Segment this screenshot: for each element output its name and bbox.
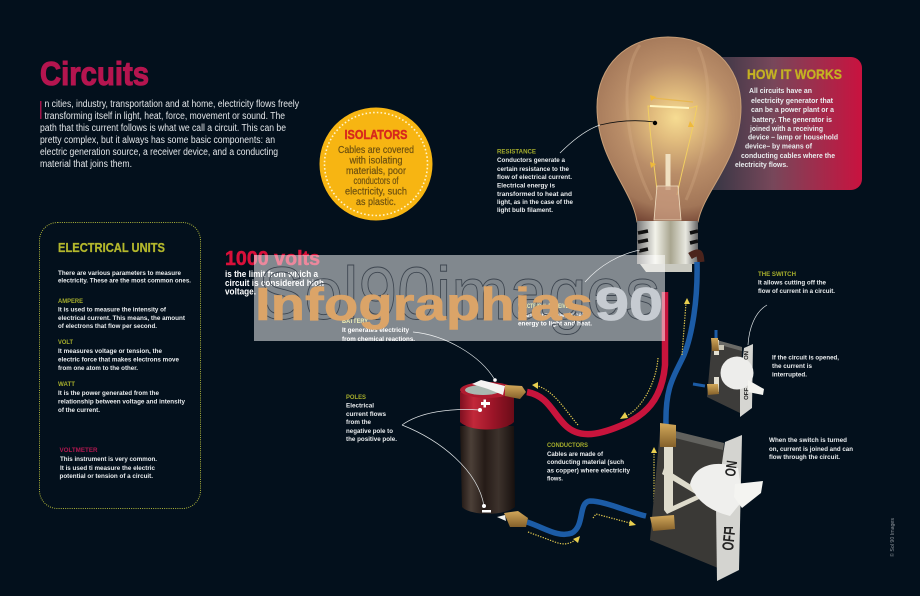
heading: how it works: HOW IT WORKS	[747, 66, 842, 82]
text: circuit opened	[772, 354, 839, 378]
intro text block: electric generation source, a receiver device, and a conducting	[40, 147, 278, 158]
text: conductors: as copper) where electricity	[547, 468, 630, 474]
callout: isolators: materials, poor	[346, 166, 407, 177]
text: poles: POLES	[346, 394, 367, 401]
how it works text: All circuits have an	[749, 88, 812, 95]
blue cable upper	[666, 262, 697, 425]
text: the switch: THE SWITCH	[758, 271, 796, 278]
how it works text: electricity flows.	[735, 162, 788, 169]
watermark infographias: Infographias	[255, 278, 593, 330]
text: resistance: Electrical energy is	[497, 182, 555, 190]
how it works text: device– by means of	[745, 144, 813, 150]
text: electrical receiver: energy to light and heat.	[518, 320, 592, 328]
watermark banner	[254, 252, 665, 341]
filament	[648, 95, 697, 220]
text: circuit opened: interrupted.	[772, 372, 807, 378]
how it works text: conducting cables where the	[741, 153, 835, 160]
ampere: It is used to measure the intensity of	[58, 306, 167, 314]
text: conductors	[547, 442, 630, 482]
voltmeter	[60, 447, 157, 480]
text: circuit closed: When the switch is turned	[769, 437, 847, 444]
text: conductors: CONDUCTORS	[547, 442, 589, 449]
red cable	[527, 292, 665, 434]
light bulb	[597, 37, 741, 272]
current flow arrows	[528, 298, 690, 544]
volt: VOLT	[58, 339, 73, 346]
voltmeter: VOLTMETER	[60, 447, 98, 454]
large switch (closed): OFF	[718, 527, 739, 551]
battery connectors	[505, 385, 526, 399]
callout: isolators	[320, 108, 432, 220]
text: circuit opened: the current is	[772, 363, 812, 370]
text: 1000 volts: 1000 volts	[225, 248, 320, 270]
switch plate	[716, 435, 742, 581]
blue cable lower	[527, 501, 646, 534]
copyright: © Sol 90 Images	[889, 518, 896, 557]
callout: isolators: as plastic.	[356, 197, 396, 208]
watt: of the current.	[58, 407, 100, 414]
text: poles: Electrical	[346, 402, 374, 410]
watt: It is the power generated from the	[58, 390, 159, 397]
contacts and arms	[664, 445, 673, 510]
text: 1000 volts: is the limit from which a	[225, 269, 319, 279]
text: 1000 volts: voltage.	[225, 286, 256, 296]
text: poles: current flows	[346, 411, 386, 418]
watt: relationship between voltage and intensity	[58, 398, 185, 406]
callout: isolators: Cables are covered	[338, 145, 414, 156]
text: the switch: It allows cutting off the	[758, 280, 826, 286]
text: poles	[346, 394, 397, 443]
intro text block: material that joins them.	[40, 159, 132, 170]
watt: WATT	[58, 381, 75, 388]
small switch (open)	[707, 338, 764, 417]
voltmeter: It is used ti measure the electric	[60, 465, 155, 472]
text: resistance: certain resistance to the	[497, 166, 569, 173]
text: battery: BATTERY	[342, 318, 369, 325]
small switch (open): OFF	[744, 388, 750, 400]
text: electrical receiver: ELECTRICAL RECEIVER	[518, 303, 572, 310]
text: circuit closed	[769, 437, 853, 461]
text: battery	[342, 318, 415, 343]
text: resistance	[497, 148, 573, 214]
battery	[460, 380, 528, 527]
how it works text: device – lamp or household	[748, 134, 838, 142]
ampere: electrical current. This means, the amount	[58, 315, 186, 322]
brass terminals	[660, 423, 676, 447]
text: poles: from the	[346, 419, 371, 426]
switch disc	[690, 464, 743, 516]
blue stub on small switch	[693, 330, 716, 386]
panel: electrical units	[40, 222, 200, 508]
heading: electrical units: ELECTRICAL UNITS	[58, 241, 165, 255]
how it works text: electricity generator that	[751, 98, 834, 105]
small switch (open): ON	[744, 351, 750, 360]
voltmeter: potential or tension of a circuit.	[60, 473, 153, 480]
text: the switch: flow of current in a circuit.	[758, 288, 835, 295]
large switch (closed)	[650, 423, 763, 581]
leader lines	[402, 121, 767, 508]
watermark 90: 90	[595, 278, 663, 330]
text: resistance: transformed to heat and	[497, 191, 572, 198]
text: battery: It generates electricity	[342, 327, 409, 334]
how it works text: joined with a receiving	[749, 126, 823, 133]
callout: isolators: with isolating	[349, 156, 402, 166]
volt: from one atom to the other.	[58, 365, 138, 372]
intro text block: transforming itself in light, heat, force, movement or sound. The	[44, 111, 285, 122]
volt	[58, 339, 179, 372]
watermark outline text: Sol90images	[258, 252, 660, 335]
ampere: of electrons that flow per second.	[58, 323, 157, 330]
intro text block: path that this current follows is what we call a circuit. This can be	[40, 123, 286, 134]
intro text block	[40, 99, 299, 170]
callout: isolators: conductors of	[354, 176, 399, 187]
text: resistance: light, as in the case of the	[497, 199, 573, 206]
volt: It measures voltage or tension, the	[58, 348, 162, 355]
text: poles: negative pole to	[346, 428, 393, 435]
watt	[58, 381, 185, 414]
callout: isolators: electricity, such	[345, 186, 407, 198]
text: conductors: flows.	[547, 476, 563, 482]
text: conductors: conducting material (such	[547, 459, 624, 466]
units intro	[58, 270, 191, 284]
text: 1000 volts: circuit is considered high	[225, 278, 324, 288]
ampere	[58, 298, 186, 330]
text: electrical receiver	[518, 303, 592, 328]
plus sign	[481, 400, 490, 408]
intro text block: n cities, industry, transportation and at home, electricity flows freely	[44, 99, 299, 110]
text: circuit closed: flow through the circuit.	[769, 454, 840, 461]
text: resistance: RESISTANCE	[497, 148, 537, 156]
text: circuit closed: on, current is joined and can	[769, 446, 853, 453]
text: the switch	[758, 271, 835, 295]
how it works text: battery. The generator is	[752, 117, 832, 124]
intro text block: pretty complex, but it always has some basic components: an	[40, 135, 275, 146]
volt: electric force that makes electrons move	[58, 356, 179, 364]
minus sign	[482, 510, 491, 512]
title: Circuits	[40, 55, 149, 92]
how it works text: can be a power plant or a	[751, 107, 834, 114]
text: resistance: Conductors generate a	[497, 157, 565, 164]
text: battery: from chemical reactions.	[342, 336, 415, 343]
text: 1000 volts	[225, 248, 324, 296]
units intro: There are various parameters to measure	[58, 270, 181, 277]
callout: isolators: ISOLATORS	[344, 128, 408, 142]
lamp screw base	[637, 221, 701, 272]
battery positive terminal	[472, 380, 505, 395]
text: resistance: flow of electrical current.	[497, 174, 572, 181]
how it works text	[735, 66, 842, 169]
text: electrical receiver: Transforms electrical	[518, 312, 584, 319]
text: conductors: Cables are made of	[547, 451, 604, 458]
switch handle	[734, 481, 763, 508]
voltmeter: This instrument is very common.	[60, 456, 157, 463]
text: resistance: light bulb filament.	[497, 207, 553, 214]
units intro: electricity. These are the most common ones.	[58, 278, 191, 284]
text: poles: the positive pole.	[346, 436, 397, 443]
ampere: AMPERE	[58, 298, 84, 305]
panel: how it works	[700, 57, 862, 190]
text: circuit opened: If the circuit is opened,	[772, 354, 839, 362]
large switch (closed): ON	[721, 459, 741, 477]
